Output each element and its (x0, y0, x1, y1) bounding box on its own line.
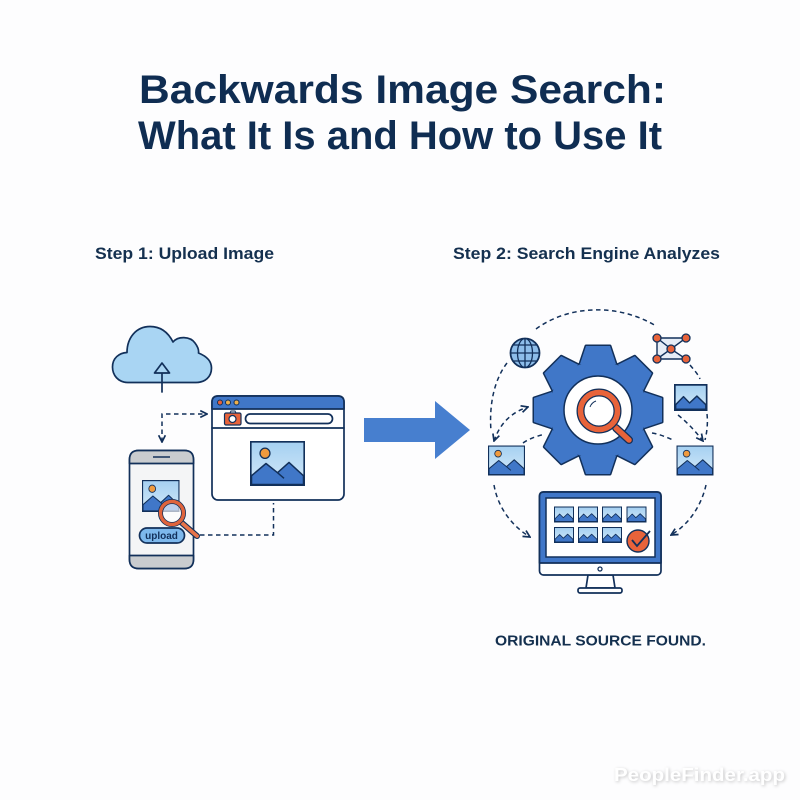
icon: upload cloud (112, 326, 212, 392)
heading: step 2: Step 2: Search Engine Analyzes (453, 244, 720, 263)
icon: check badge (627, 530, 650, 552)
icon: monitor with results (540, 492, 661, 593)
image: right top (675, 385, 707, 410)
arrow: dashed phone to browser (162, 414, 207, 442)
phone image (143, 481, 179, 511)
arrow: step 1 to step 2 (364, 401, 470, 459)
panel: browser window (212, 396, 344, 500)
icon: magnifier (160, 502, 197, 536)
search bar (246, 414, 332, 424)
arrows: dashed flow (491, 310, 707, 537)
panel: step 2 illustration (489, 310, 713, 593)
watermark: PeopleFinder.app (614, 764, 785, 785)
icon: network nodes (653, 334, 690, 363)
title (138, 68, 666, 158)
image: right (677, 446, 713, 475)
results grid (554, 507, 646, 542)
panel: phone (130, 450, 197, 568)
arrow: dashed magnifier to browser (200, 503, 274, 535)
title: What It Is and How to Use It (138, 114, 662, 158)
icon: gear with magnifier (534, 346, 662, 474)
upload button: upload (145, 531, 178, 542)
panel: step 1 illustration (112, 326, 344, 568)
icon: camera (224, 411, 241, 425)
icon: globe (510, 338, 540, 368)
heading: step 1: Step 1: Upload Image (95, 244, 274, 263)
title: Backwards Image Search: (139, 68, 666, 112)
caption: ORIGINAL SOURCE FOUND. (495, 632, 706, 650)
image placeholder (251, 442, 304, 485)
image: left (489, 446, 524, 475)
